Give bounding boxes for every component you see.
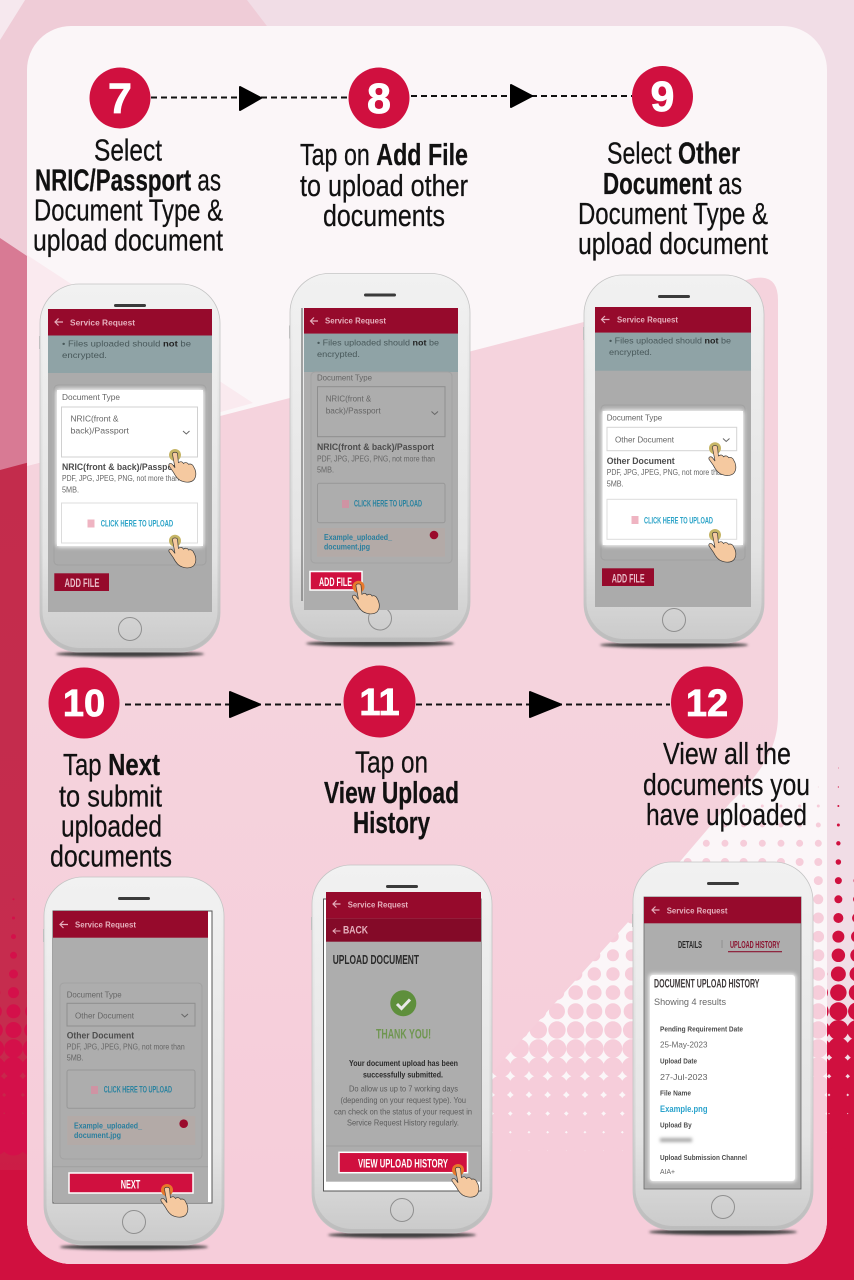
step 7 heading: Select <box>94 133 162 168</box>
screen: step 7: Document Type <box>62 392 120 402</box>
step 11 heading: History <box>353 805 431 840</box>
step 10 number badge: 10 <box>63 683 105 725</box>
screen: step 10: Other Document <box>67 1030 135 1041</box>
screen: step 12: UPLOAD HISTORY <box>730 940 780 951</box>
arrow 10 to 11 <box>125 692 343 717</box>
arrow 8 to 9 <box>411 85 632 107</box>
screen: step 9: • Files uploaded should not be <box>609 335 731 345</box>
screen: step 9: CLICK HERE TO UPLOAD <box>644 515 713 525</box>
screen: step 12: File Name <box>660 1089 691 1098</box>
step 10 heading: Tap Next <box>63 747 160 782</box>
screen: step 8: 5MB. <box>317 466 334 475</box>
screen: step 7: ADD FILE <box>64 576 100 590</box>
screen: step 9: Other Document <box>607 456 675 467</box>
step 8 number badge: 8 <box>367 75 391 123</box>
screen: step 8: encrypted. <box>317 349 360 359</box>
screen: step 8: NRIC(front & <box>326 394 372 404</box>
step 7 heading: Document Type & <box>34 193 223 228</box>
step 7 heading: NRIC/Passport as <box>35 163 221 198</box>
screen: step 10: PDF, JPG, JPEG, PNG, not more than <box>67 1042 185 1051</box>
step 9 heading <box>578 136 768 261</box>
screen: step 10: CLICK HERE TO UPLOAD <box>104 1085 172 1095</box>
step 9 number badge: 9 <box>651 73 674 121</box>
screen: step 9: encrypted. <box>609 347 652 357</box>
step 7 number badge: 7 <box>108 75 132 123</box>
screen: step 8: PDF, JPG, JPEG, PNG, not more than <box>317 454 435 463</box>
screen: step 7: • Files uploaded should not be <box>62 338 191 348</box>
screen: step 8: NRIC(front & back)/Passport <box>317 442 435 453</box>
step 9 number badge <box>632 66 693 127</box>
step 9 heading: Document as <box>603 166 742 201</box>
screen: step 12: Upload Submission Channel <box>660 1153 747 1162</box>
screen: step 8: document.jpg <box>324 541 370 551</box>
screen: step 12: 27-Jul-2023 <box>660 1072 708 1082</box>
screen: step 9: PDF, JPG, JPEG, PNG, not more than <box>607 468 725 477</box>
screen: step 11: THANK YOU! <box>376 1025 431 1041</box>
step 7 heading <box>33 133 223 258</box>
screen: step 11: UPLOAD DOCUMENT <box>333 952 419 967</box>
step 11 heading <box>324 745 459 840</box>
screen: step 9: Document Type <box>607 413 662 423</box>
step 10 heading: to submit <box>59 779 162 814</box>
screen: step 12 <box>644 897 801 1189</box>
phone: step 7 <box>39 284 220 657</box>
screen: step 12: Upload Date <box>660 1056 697 1065</box>
screen: step 8: Service Request <box>325 315 386 325</box>
screen: step 10 <box>53 911 212 1217</box>
step 7 number badge <box>90 68 150 128</box>
step 8 heading: Tap on Add File <box>300 137 468 172</box>
screen: step 10: Example_uploaded_ <box>74 1120 142 1130</box>
screen: step 9 <box>595 307 751 607</box>
step 8 heading: documents <box>323 198 445 233</box>
step 11 heading: Tap on <box>355 745 428 780</box>
screen: step 12: AIA+ <box>660 1167 676 1176</box>
screen: step 7: NRIC(front & back)/Passport <box>62 462 180 473</box>
screen: step 8: back)/Passport <box>326 406 381 416</box>
screen: step 11: Service Request History regularly. <box>347 1117 459 1127</box>
screen: step 7: PDF, JPG, JPEG, PNG, not more than <box>62 474 179 483</box>
step 12 heading: documents you <box>643 767 810 802</box>
screen: step 8: Document Type <box>317 373 372 383</box>
screen: step 7: encrypted. <box>62 350 107 360</box>
screen: step 8: Example_uploaded_ <box>324 532 392 542</box>
step 9 heading: Select Other <box>607 136 740 170</box>
screen: step 12: 25-May-2023 <box>660 1039 708 1049</box>
step 10 number badge <box>48 668 120 738</box>
arrow 11 to 12 <box>416 692 670 717</box>
step 11 number badge: 11 <box>359 682 400 724</box>
screen: step 11: VIEW UPLOAD HISTORY <box>358 1156 448 1170</box>
screen: step 8: CLICK HERE TO UPLOAD <box>354 499 422 509</box>
screen: step 10: Other Document <box>75 1010 135 1020</box>
screen: step 12: DETAILS <box>678 940 702 951</box>
step 12 heading <box>643 736 810 832</box>
screen: step 9: ADD FILE <box>612 572 645 586</box>
step 9 heading: upload document <box>578 226 768 261</box>
screen: step 10: 5MB. <box>67 1053 84 1062</box>
screen: step 11: (depending on your request type). You <box>340 1095 466 1105</box>
screen: step 11: Do allow us up to 7 working days <box>349 1084 458 1094</box>
screen: step 12: Service Request <box>667 905 728 915</box>
step 12 number badge <box>671 666 743 738</box>
screen: step 10: document.jpg <box>74 1130 121 1140</box>
step 8 heading: to upload other <box>300 168 468 203</box>
step 10 heading: uploaded <box>61 809 162 844</box>
screen: step 7: Service Request <box>70 318 135 328</box>
screen: step 7: back)/Passport <box>70 426 130 436</box>
screen: step 10: Service Request <box>75 920 136 930</box>
screen: step 9: Other Document <box>615 435 675 445</box>
screen: step 12: Example.png <box>660 1104 708 1114</box>
step 12 heading: have uploaded <box>646 797 807 832</box>
phone: step 10 <box>43 877 224 1250</box>
screen: step 10: Document Type <box>67 989 122 999</box>
step 11 heading: View Upload <box>324 775 459 810</box>
phone: step 9 <box>583 275 764 648</box>
screen: step 12: DOCUMENT UPLOAD HISTORY <box>654 978 760 990</box>
screen: step 8: • Files uploaded should not be <box>317 337 439 347</box>
screen: step 11: Your document upload has been <box>349 1058 458 1068</box>
screen: step 11: successfully submitted. <box>363 1069 443 1079</box>
screen: step 11: Service Request <box>348 899 408 909</box>
screen: step 8 <box>302 308 458 614</box>
screen: step 11: can check on the status of your request in <box>334 1106 472 1116</box>
step 8 heading <box>300 137 468 233</box>
step 10 heading <box>50 747 172 874</box>
screen: step 12: Upload By <box>660 1121 692 1130</box>
screen: step 8: ADD FILE <box>319 575 352 589</box>
screen: step 12: Showing 4 results <box>654 997 726 1008</box>
screen: step 9: Service Request <box>617 314 678 324</box>
arrow 7 to 8 <box>151 87 349 110</box>
step 8 number badge <box>348 68 410 128</box>
step 9 heading: Document Type & <box>578 196 768 231</box>
screen: step 7: CLICK HERE TO UPLOAD <box>101 519 174 529</box>
phone: step 11 <box>311 865 492 1238</box>
screen: step 7: 5MB. <box>62 486 79 494</box>
step 10 heading: documents <box>50 839 172 874</box>
step 12 heading: View all the <box>663 736 791 771</box>
step 7 heading: upload document <box>33 223 223 258</box>
screen: step 7: NRIC(front & <box>70 414 119 424</box>
screen: step 12: Pending Requirement Date <box>660 1025 743 1034</box>
phone: step 8 <box>289 274 470 646</box>
screen: step 11 <box>324 892 481 1197</box>
screen: step 9: 5MB. <box>607 480 624 489</box>
phone: step 12 <box>632 862 813 1235</box>
screen: step 7 <box>48 309 212 612</box>
step 12 number badge: 12 <box>686 683 728 725</box>
screen: step 10: NEXT <box>121 1177 141 1191</box>
screen: step 11: BACK <box>343 924 368 936</box>
step 11 number badge <box>344 666 416 738</box>
